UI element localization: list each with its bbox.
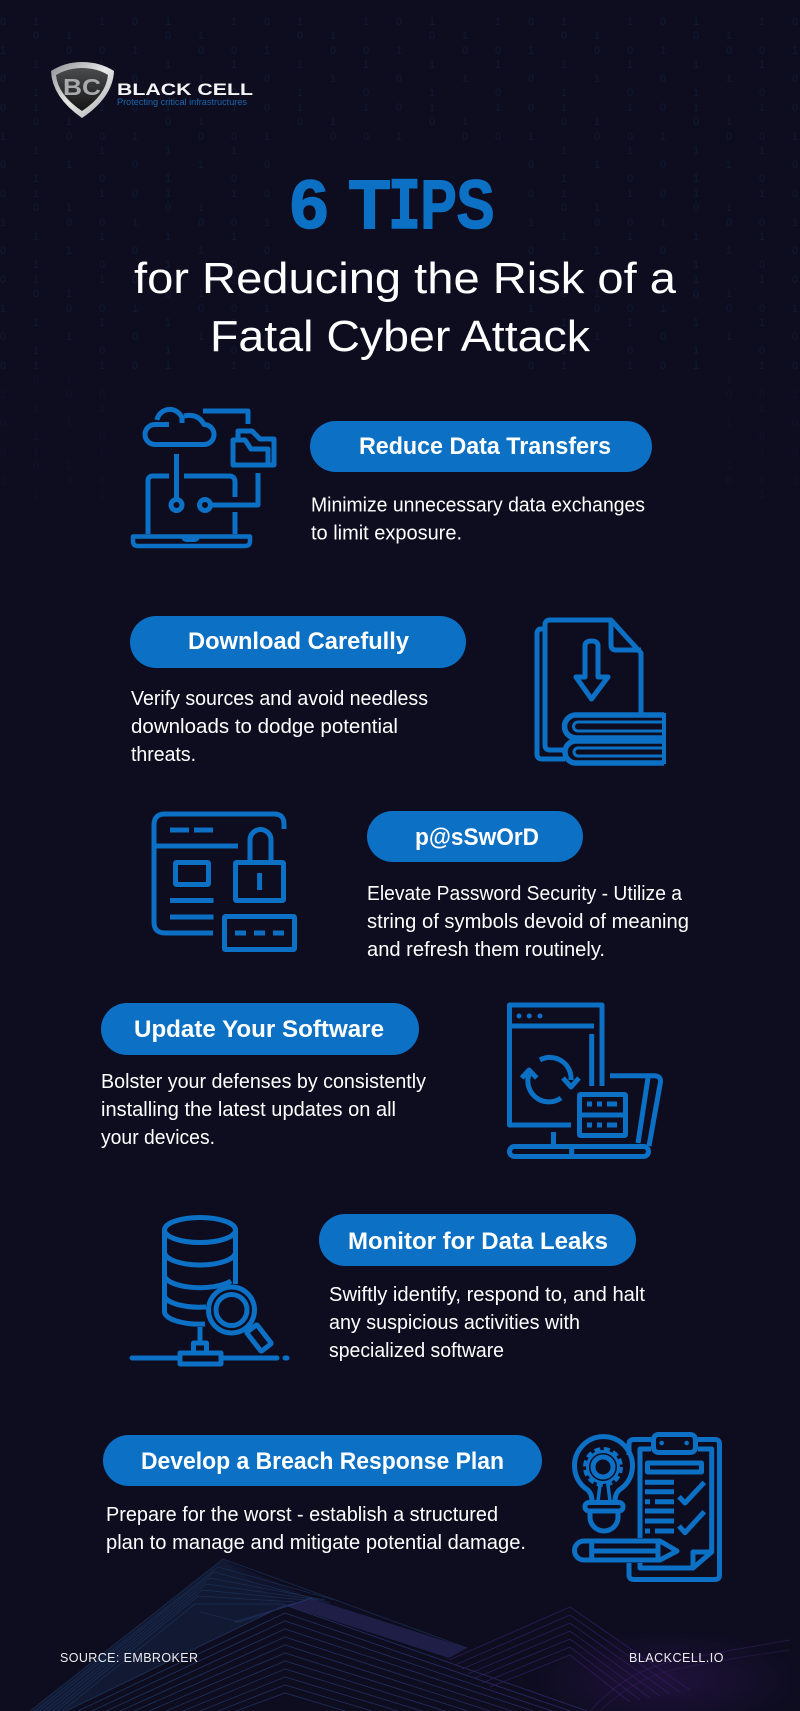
panel: tip 2 download carefully [130, 616, 664, 766]
description [101, 1071, 426, 1149]
description: Minimize unnecessary data exchanges [311, 494, 645, 516]
description: Verify sources and avoid needless [131, 688, 428, 710]
title [134, 166, 677, 361]
icon: lightbulb, clipboard and pencil [574, 1434, 720, 1580]
pill heading: Reduce Data Transfers [359, 433, 611, 460]
description [131, 688, 428, 766]
description: specialized software [329, 1340, 504, 1362]
pill heading: Download Carefully [188, 628, 410, 655]
pill heading: Monitor for Data Leaks [348, 1228, 608, 1255]
description: Elevate Password Security - Utilize a [367, 883, 683, 905]
description: Swiftly identify, respond to, and halt [329, 1284, 645, 1306]
headline: 6 TIPS: T [349, 166, 390, 243]
description: and refresh them routinely. [367, 939, 605, 961]
description: any suspicious activities with [329, 1312, 580, 1334]
tagline: Protecting critical infrastructures [117, 97, 248, 107]
headline: 6 TIPS: P [420, 166, 456, 243]
description: Bolster your defenses by consistently [101, 1071, 426, 1093]
logo: Black Cell [51, 62, 253, 118]
description [311, 494, 645, 544]
headline: 6 TIPS [290, 166, 494, 250]
panel: tip 4 update software [101, 1003, 661, 1157]
panel: tip 1 reduce data transfers [133, 409, 652, 546]
description: Prepare for the worst - establish a structured [106, 1504, 498, 1526]
description [329, 1284, 645, 1362]
description: to limit exposure. [311, 522, 462, 544]
panel: tip 5 monitor for data leaks [132, 1214, 645, 1364]
headline: 6 TIPS: S [456, 166, 494, 243]
footer: website: BLACKCELL.IO [629, 1651, 724, 1665]
pill heading [367, 811, 583, 862]
description [106, 1504, 526, 1554]
panel: tip 6 breach response plan [103, 1434, 720, 1580]
pill heading: Update Your Software [134, 1016, 384, 1043]
description: plan to manage and mitigate potential damage. [106, 1532, 526, 1554]
icon: login window with padlock [154, 814, 294, 950]
description: your devices. [101, 1127, 215, 1149]
line-art mountains [30, 1559, 800, 1711]
description: string of symbols devoid of meaning [367, 911, 689, 933]
pill heading [310, 421, 652, 472]
icon: database with magnifier [132, 1218, 287, 1364]
description: downloads to dodge potential [131, 716, 398, 738]
subtitle line 1: for Reducing the Risk of a [134, 254, 677, 303]
footer: source: SOURCE: EMBROKER [60, 1651, 198, 1665]
pill heading [103, 1435, 542, 1486]
description: installing the latest updates on all [101, 1099, 396, 1121]
panel: tip 3 password [154, 811, 689, 961]
icon: shield [51, 62, 114, 118]
binary rain backdrop [0, 14, 800, 501]
brand name: BLACK CELL [117, 81, 253, 99]
icon: document download with books [537, 620, 664, 764]
pill heading [319, 1214, 636, 1266]
subtitle line 2: Fatal Cyber Attack [210, 312, 591, 361]
description: threats. [131, 744, 196, 766]
pill heading [130, 616, 466, 668]
pill heading: Develop a Breach Response Plan [141, 1448, 504, 1475]
icon: cloud, folder and laptop [133, 409, 274, 546]
icon: software update screens [510, 1005, 661, 1157]
icon: shield: BC [63, 74, 101, 100]
pill heading [101, 1003, 419, 1055]
pill heading: p@sSwOrD [415, 824, 539, 851]
headline: 6 TIPS: I [388, 167, 421, 250]
headline: 6 TIPS: 6 [290, 166, 328, 243]
description [367, 883, 689, 961]
